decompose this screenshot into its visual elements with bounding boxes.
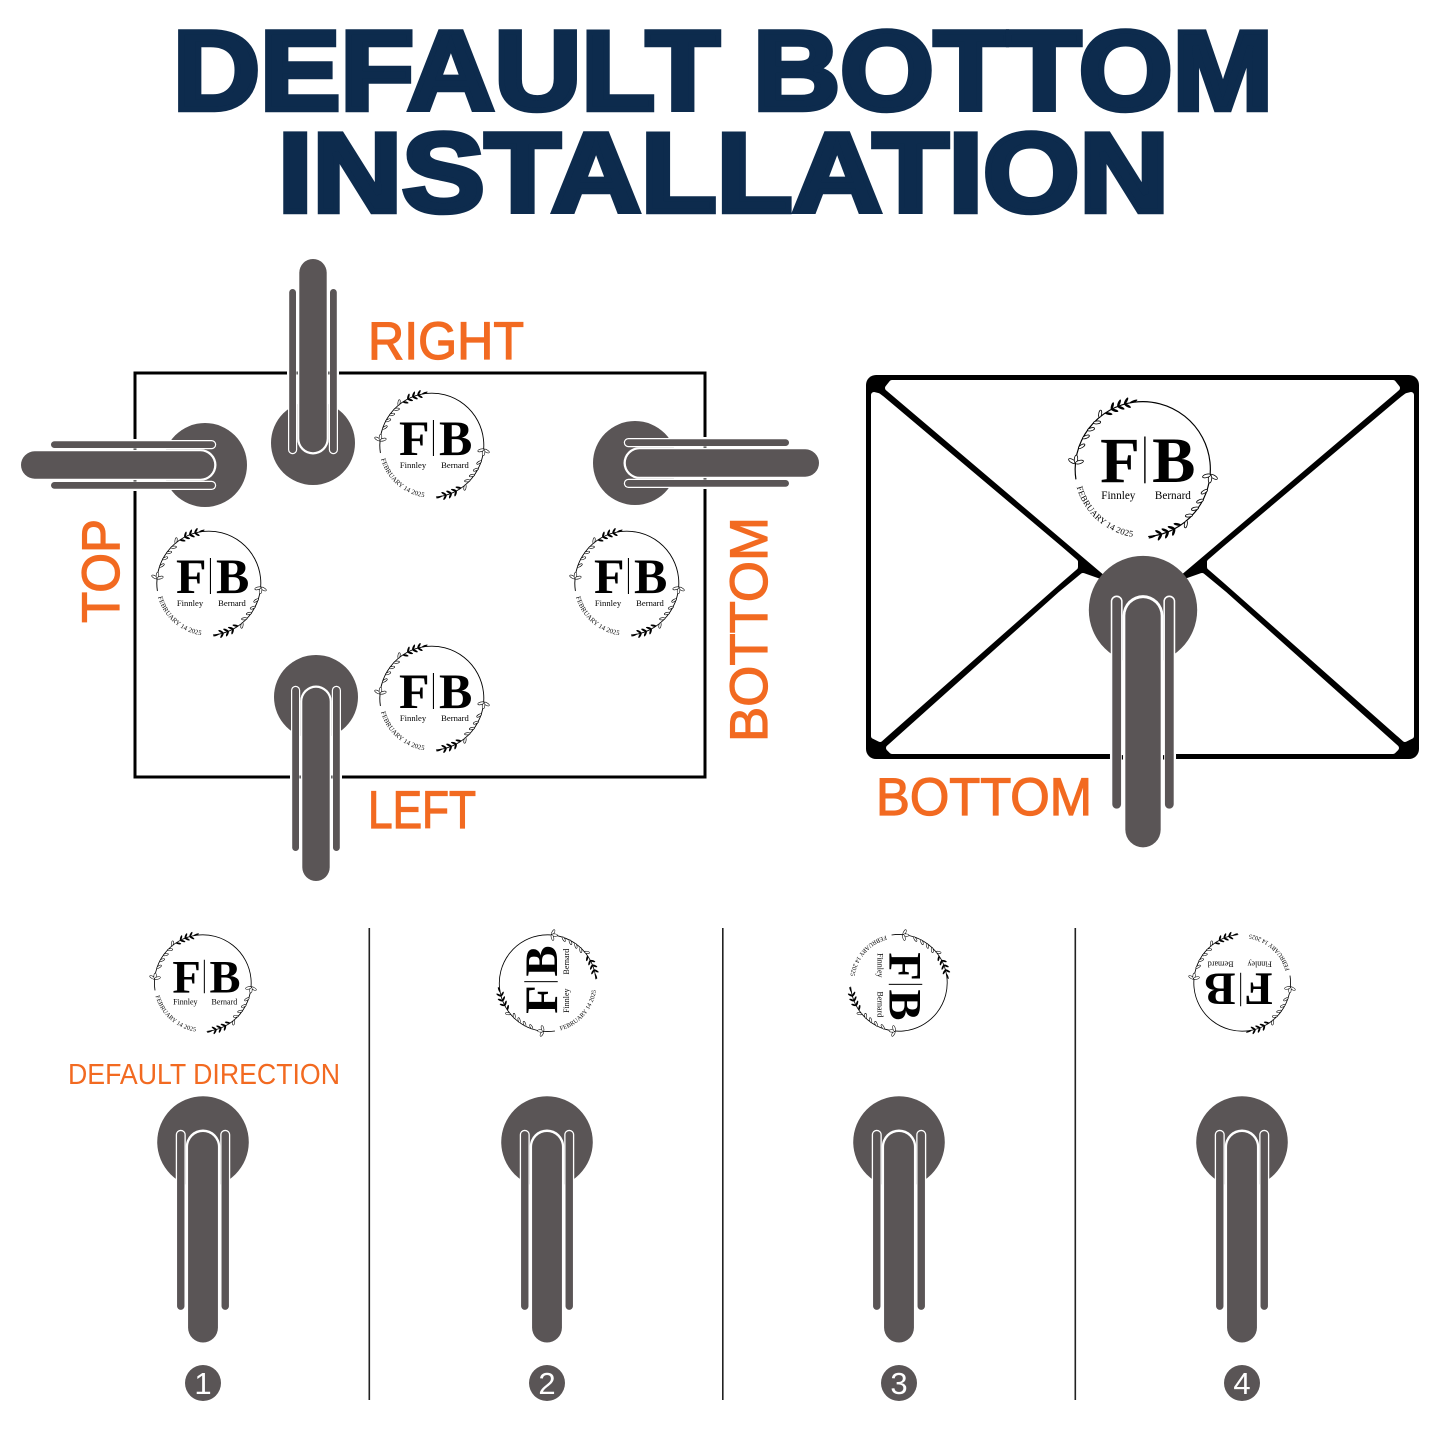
number badge 3 bbox=[881, 1365, 917, 1401]
seal: envelope: Bernard bbox=[1155, 490, 1191, 502]
seal: bottom side: FEBRUARY 14 2025 bbox=[576, 596, 620, 635]
seal: top side: Bernard bbox=[218, 598, 247, 608]
seal: step 3: F bbox=[879, 952, 930, 981]
seal: left side: Finnley bbox=[400, 713, 427, 723]
clip: step 2 bbox=[501, 1096, 593, 1343]
seal: left side: F bbox=[399, 663, 430, 719]
clip: bottom position bbox=[593, 421, 820, 505]
seal: step 4: FEBRUARY 14 2025 bbox=[1249, 934, 1290, 971]
seal: step 2 bbox=[496, 929, 599, 1037]
seal: envelope: F bbox=[1100, 425, 1140, 497]
seal: right side: Finnley bbox=[400, 460, 427, 470]
seal: step 4: Bernard bbox=[1208, 960, 1233, 969]
clip: step 3 bbox=[853, 1096, 945, 1343]
label: bottom horizontal: BOTTOM bbox=[876, 768, 1092, 827]
label: left: LEFT bbox=[368, 781, 476, 840]
seal: top side bbox=[151, 528, 267, 638]
title bbox=[173, 8, 1273, 236]
seal: envelope: Finnley bbox=[1101, 490, 1136, 502]
seal: bottom side: Bernard bbox=[636, 598, 665, 608]
seal: top side: B bbox=[216, 548, 249, 604]
seal: step 1 bbox=[149, 932, 257, 1034]
panel: step 4 bbox=[1188, 932, 1296, 1401]
seal: right side: F bbox=[399, 410, 430, 466]
seal: step 4: B bbox=[1204, 963, 1235, 1014]
envelope body bbox=[866, 375, 1419, 759]
title: INSTALLATION bbox=[278, 110, 1169, 236]
panel: four side placement diagram bbox=[21, 259, 819, 881]
panel: step 2 bbox=[496, 929, 599, 1401]
seal: step 3: FEBRUARY 14 2025 bbox=[850, 936, 887, 976]
label: right: RIGHT bbox=[368, 312, 524, 371]
number badge 2 bbox=[529, 1365, 565, 1401]
seal: envelope bbox=[1068, 398, 1218, 540]
seal: left side: FEBRUARY 14 2025 bbox=[381, 710, 424, 750]
seal: envelope: FEBRUARY 14 2025 bbox=[1076, 486, 1133, 537]
title: DEFAULT BOTTOM bbox=[173, 8, 1273, 134]
clip: top position bbox=[20, 423, 247, 507]
seal: left side bbox=[374, 643, 490, 753]
seal: step 3: B bbox=[879, 990, 930, 1021]
seal: step 4 bbox=[1188, 932, 1296, 1034]
seal: step 1: Finnley bbox=[173, 997, 198, 1006]
seal: step 1: B bbox=[210, 952, 241, 1003]
seal: top side: FEBRUARY 14 2025 bbox=[158, 596, 202, 635]
seal: right side: B bbox=[439, 410, 472, 466]
seal: step 2: F bbox=[517, 985, 568, 1014]
seal: right side: Bernard bbox=[441, 460, 470, 470]
number badge 4: 4 bbox=[1233, 1366, 1251, 1401]
seal: step 1: F bbox=[172, 952, 201, 1003]
seal: bottom side: Finnley bbox=[595, 598, 622, 608]
seal: step 3: Bernard bbox=[876, 992, 885, 1017]
clip: step 4 bbox=[1196, 1096, 1288, 1343]
seal: left side: B bbox=[439, 663, 472, 719]
clip: envelope bottom bbox=[1089, 556, 1197, 848]
clip: left position bbox=[274, 655, 358, 882]
seal: step 3: Finnley bbox=[876, 953, 885, 978]
seal: step 1: Bernard bbox=[212, 997, 237, 1006]
seal: step 4: F bbox=[1244, 963, 1273, 1014]
seal: step 2: FEBRUARY 14 2025 bbox=[560, 990, 596, 1030]
label: default direction: DEFAULT DIRECTION bbox=[68, 1059, 340, 1091]
label: bottom vertical: BOTTOM bbox=[720, 517, 779, 742]
seal: step 3 bbox=[848, 929, 950, 1037]
seal: envelope: B bbox=[1152, 425, 1195, 497]
seal: top side: Finnley bbox=[177, 598, 204, 608]
card outline bbox=[135, 373, 705, 777]
seal: step 2: B bbox=[517, 945, 568, 976]
label: top: TOP bbox=[72, 519, 131, 623]
clip: step 1 bbox=[157, 1096, 249, 1343]
seal: step 1: FEBRUARY 14 2025 bbox=[156, 995, 196, 1032]
panel: envelope with bottom clip bbox=[866, 375, 1419, 848]
number badge 1 bbox=[185, 1365, 221, 1401]
seal: right side: FEBRUARY 14 2025 bbox=[381, 458, 424, 497]
panel: step 3 bbox=[848, 929, 950, 1401]
seal: bottom side: F bbox=[594, 548, 625, 604]
seal: step 2: Finnley bbox=[562, 988, 571, 1013]
seal: left side: Bernard bbox=[441, 713, 470, 723]
number badge 1: 1 bbox=[194, 1366, 212, 1401]
clip: right position bbox=[271, 258, 355, 485]
number badge 2: 2 bbox=[538, 1366, 556, 1401]
seal: top side: F bbox=[176, 548, 207, 604]
number badge 3: 3 bbox=[890, 1366, 908, 1401]
number badge 4 bbox=[1224, 1365, 1260, 1401]
seal: bottom side bbox=[569, 528, 685, 638]
panel: step 1 default direction bbox=[68, 932, 340, 1401]
seal: bottom side: B bbox=[634, 548, 667, 604]
seal: step 2: Bernard bbox=[562, 949, 571, 974]
seal: step 4: Finnley bbox=[1247, 960, 1272, 969]
seal: right side bbox=[374, 390, 490, 500]
